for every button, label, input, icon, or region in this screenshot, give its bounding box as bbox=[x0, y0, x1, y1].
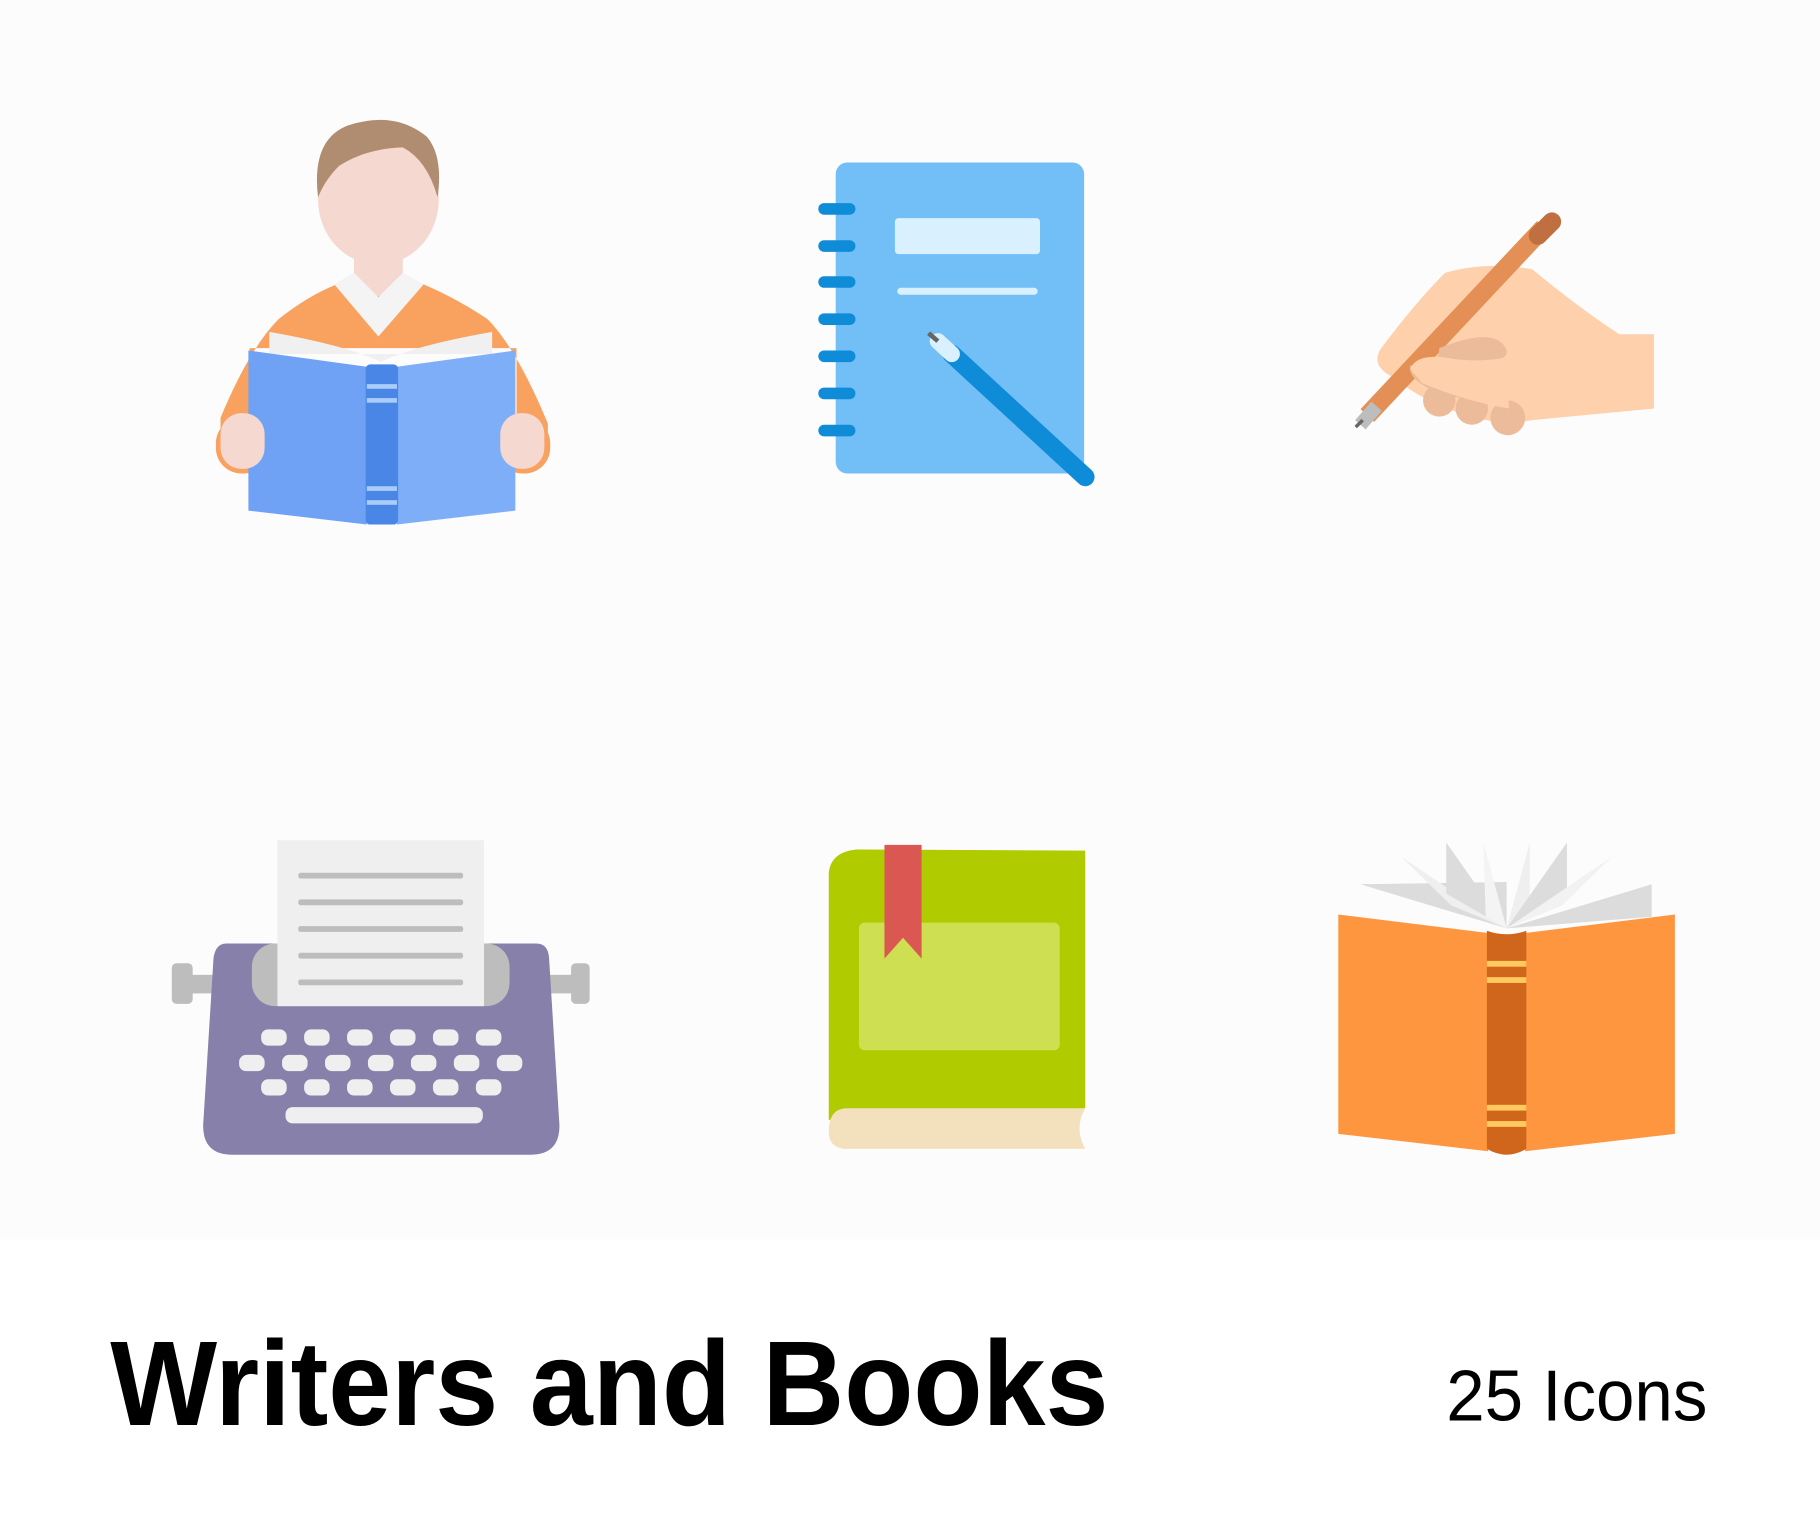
icon: typewriter bbox=[172, 840, 590, 1155]
title: Writers and Books bbox=[110, 1316, 1108, 1451]
icon: notebook bbox=[818, 162, 1085, 477]
icon: reader bbox=[216, 120, 550, 525]
icon: green book bbox=[829, 845, 1085, 1149]
icon: hand writing bbox=[1356, 222, 1654, 435]
icon: open orange book bbox=[1338, 843, 1675, 1155]
subtitle: icon count: 25 Icons bbox=[1446, 1356, 1707, 1436]
